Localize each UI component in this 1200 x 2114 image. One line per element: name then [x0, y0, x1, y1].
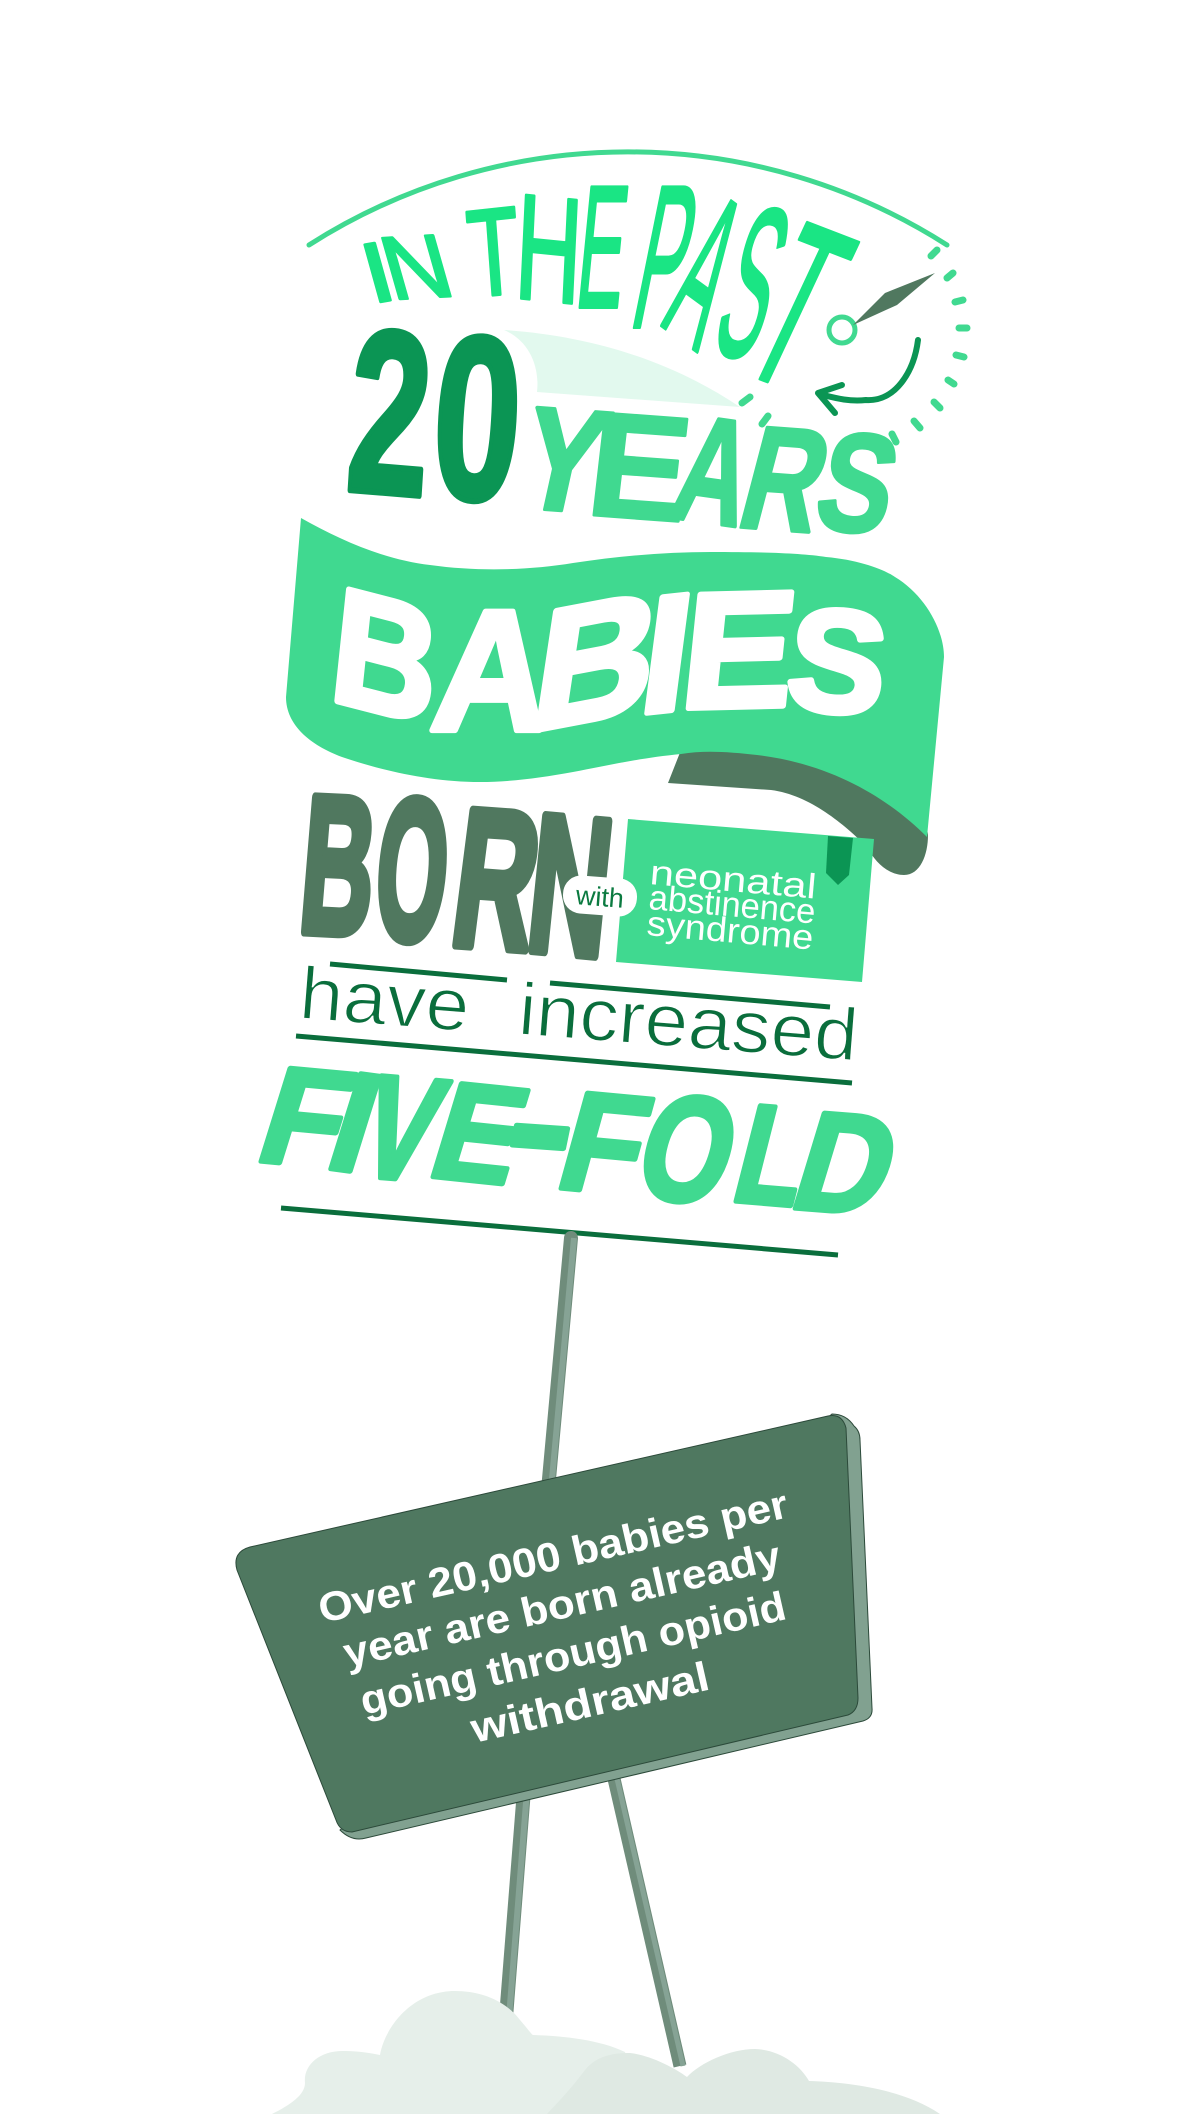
- sign edge: [340, 1414, 872, 1839]
- word: BORN: [293, 754, 621, 998]
- pill: with: with: [574, 880, 625, 914]
- icon: bookmark: [826, 836, 853, 885]
- banner fold: [668, 745, 928, 875]
- word: BABIES: E: [674, 557, 805, 744]
- heading: IN THE PAST: E: [570, 150, 636, 345]
- heading: IN THE PAST: H: [512, 164, 586, 336]
- label text: abstinence: [647, 878, 817, 932]
- label text: syndrome: [645, 904, 815, 958]
- word: FIVE-FOLD: F: [544, 1063, 666, 1225]
- sign text: going through opioid: [356, 1583, 790, 1724]
- cloud: front: [547, 2049, 940, 2114]
- sign post: right leg: [612, 1770, 683, 2066]
- word: FIVE-FOLD: E: [416, 1054, 544, 1214]
- sign text: year are born already: [339, 1532, 785, 1676]
- heading: IN THE PAST: T: [714, 177, 882, 437]
- heading: IN THE PAST: T: [463, 181, 524, 324]
- sign text: Over 20,000 babies per: [314, 1481, 792, 1632]
- number: 20: [341, 281, 529, 552]
- word: BORN: N: [520, 773, 621, 998]
- clock: ring, needle, ticks, arrow: [742, 250, 967, 442]
- sign post: left leg: [505, 1790, 527, 2030]
- word: YEARS: Y: [506, 375, 622, 544]
- word: FIVE-FOLD: V: [343, 1045, 461, 1212]
- heading: IN THE PAST: N: [370, 217, 463, 319]
- arrow: [818, 340, 918, 413]
- word: YEARS: E: [580, 380, 699, 553]
- panel: neonatal abstinence syndrome: [616, 819, 874, 982]
- sign post: centre pole: [548, 1238, 574, 1490]
- word: FIVE-FOLD: L: [721, 1075, 826, 1235]
- word: FIVE-FOLD: D: [778, 1083, 916, 1244]
- cloud: back: [272, 1991, 640, 2114]
- sign face: [236, 1416, 858, 1832]
- word: BABIES: [324, 552, 895, 769]
- word: BABIES: S: [780, 577, 895, 746]
- word: FIVE-FOLD: -: [490, 1025, 596, 1220]
- heading: IN THE PAST: A: [644, 147, 768, 395]
- word: BORN: O: [369, 755, 457, 984]
- word: BABIES: I: [631, 558, 703, 751]
- word: BORN: B: [293, 754, 384, 976]
- heading: IN THE PAST: P: [619, 143, 714, 370]
- label text: [645, 853, 818, 958]
- label text: neonatal: [648, 853, 818, 907]
- number: 20: 0: [426, 286, 529, 552]
- sign board: [236, 1414, 872, 1839]
- pill: with: [562, 874, 638, 918]
- word: BABIES: B: [324, 553, 447, 761]
- number: 20: 2: [341, 281, 439, 546]
- text: have increased: [297, 951, 861, 1077]
- text: have increased: have: [297, 951, 473, 1047]
- sign text: withdrawal: [465, 1653, 713, 1752]
- word: BABIES: B: [521, 552, 672, 769]
- banner: [286, 518, 944, 837]
- word: YEARS: A: [659, 385, 770, 559]
- word: FIVE-FOLD: O: [622, 1060, 756, 1238]
- word: YEARS: R: [725, 396, 846, 563]
- word: YEARS: S: [803, 401, 913, 566]
- arc above heading: [309, 152, 947, 245]
- text: have increased: increased: [516, 967, 861, 1077]
- word: YEARS: [506, 375, 913, 566]
- word: BABIES: A: [424, 575, 561, 767]
- sign text: [314, 1481, 792, 1752]
- word: BORN: R: [442, 767, 551, 991]
- word: FIVE-FOLD: I: [313, 1043, 398, 1202]
- heading: IN THE PAST: [351, 143, 882, 437]
- heading: IN THE PAST: I: [351, 224, 404, 321]
- heading: IN THE PAST: S: [695, 163, 812, 404]
- clock sweep wedge: [504, 330, 740, 407]
- word: FIVE-FOLD: F: [243, 1038, 370, 1196]
- word: FIVE-FOLD: [243, 1025, 916, 1244]
